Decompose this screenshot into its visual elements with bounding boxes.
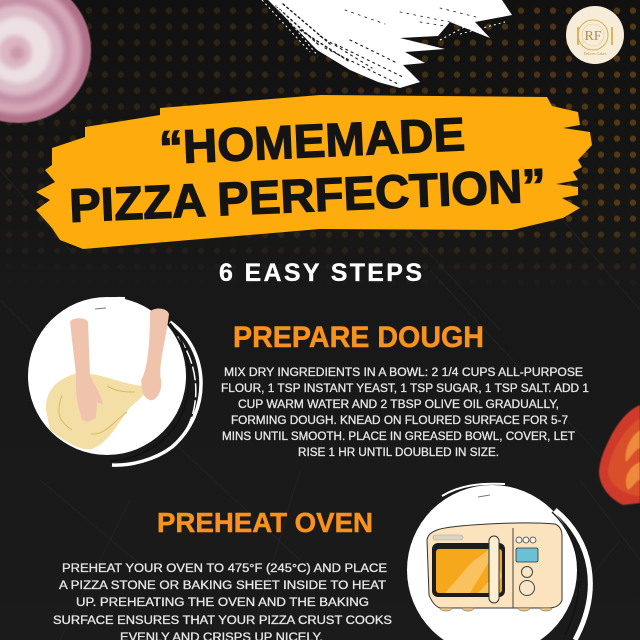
tomato slice [599, 405, 640, 505]
step 1 heading: PREPARE DOUGH [233, 321, 484, 354]
step 1 text: FORMING DOUGH. KNEAD ON FLOURED SURFACE FOR 5-7 [231, 415, 568, 427]
title banner [36, 95, 592, 249]
subtitle: 6 EASY STEPS [219, 259, 422, 287]
title text: PIZZA PERFECTION” [68, 158, 547, 232]
onion slice [0, 0, 91, 123]
step 1 text: CUP WARM WATER AND 2 TBSP OLIVE OIL GRADUALLY, [238, 399, 559, 411]
step 2 text: SURFACE ENSURES THAT YOUR PIZZA CRUST COOKS [53, 615, 392, 627]
title text [68, 107, 547, 232]
step 2 text: A PIZZA STONE OR BAKING SHEET INSIDE TO HEAT [59, 580, 386, 592]
feet [440, 608, 552, 611]
logo badge: Delices Cakes [584, 51, 607, 56]
step 1 text: RISE 1 HR UNTIL DOUBLED IN SIZE. [298, 447, 499, 459]
oven window [432, 543, 505, 597]
step 1 text: MINS UNTIL SMOOTH. PLACE IN GREASED BOWL, COVER, LET [222, 431, 575, 443]
white brush stroke [262, 0, 512, 88]
step 1 illustration: kneading dough [28, 297, 201, 465]
dials [522, 566, 532, 578]
white circle [407, 485, 577, 640]
dot pattern [0, 0, 640, 300]
yellow brush shape [36, 95, 592, 249]
step 2 illustration: oven [407, 484, 590, 640]
dough [46, 373, 145, 449]
step 1 text: FLOUR, 1 TSP INSTANT YEAST, 1 TSP SUGAR, 1 TSP SALT. ADD 1 [221, 383, 589, 395]
logo badge: RF [584, 29, 602, 44]
brush rings [442, 484, 590, 640]
brush rings [62, 298, 201, 465]
panel divider [512, 528, 514, 608]
step 2 text: PREHEAT YOUR OVEN TO 475°F (245°C) AND PLACE [62, 563, 387, 575]
small buttons [516, 537, 522, 543]
step 2 text: UP. PREHEATING THE OVEN AND THE BAKING [76, 597, 369, 609]
door handle [489, 536, 499, 603]
handle strip [433, 535, 463, 540]
step 1 text: MIX DRY INGREDIENTS IN A BOWL: 2 1/4 CUPS ALL-PURPOSE [224, 367, 583, 379]
logo badge [566, 6, 624, 64]
white circle [28, 297, 186, 455]
step 1 text [221, 367, 589, 459]
title text: “HOMEMADE [158, 107, 466, 174]
microwave body [427, 523, 562, 608]
step 2 text [53, 563, 392, 640]
display [516, 548, 538, 562]
arms and hands [70, 318, 103, 422]
step 2 heading: PREHEAT OVEN [157, 507, 373, 538]
